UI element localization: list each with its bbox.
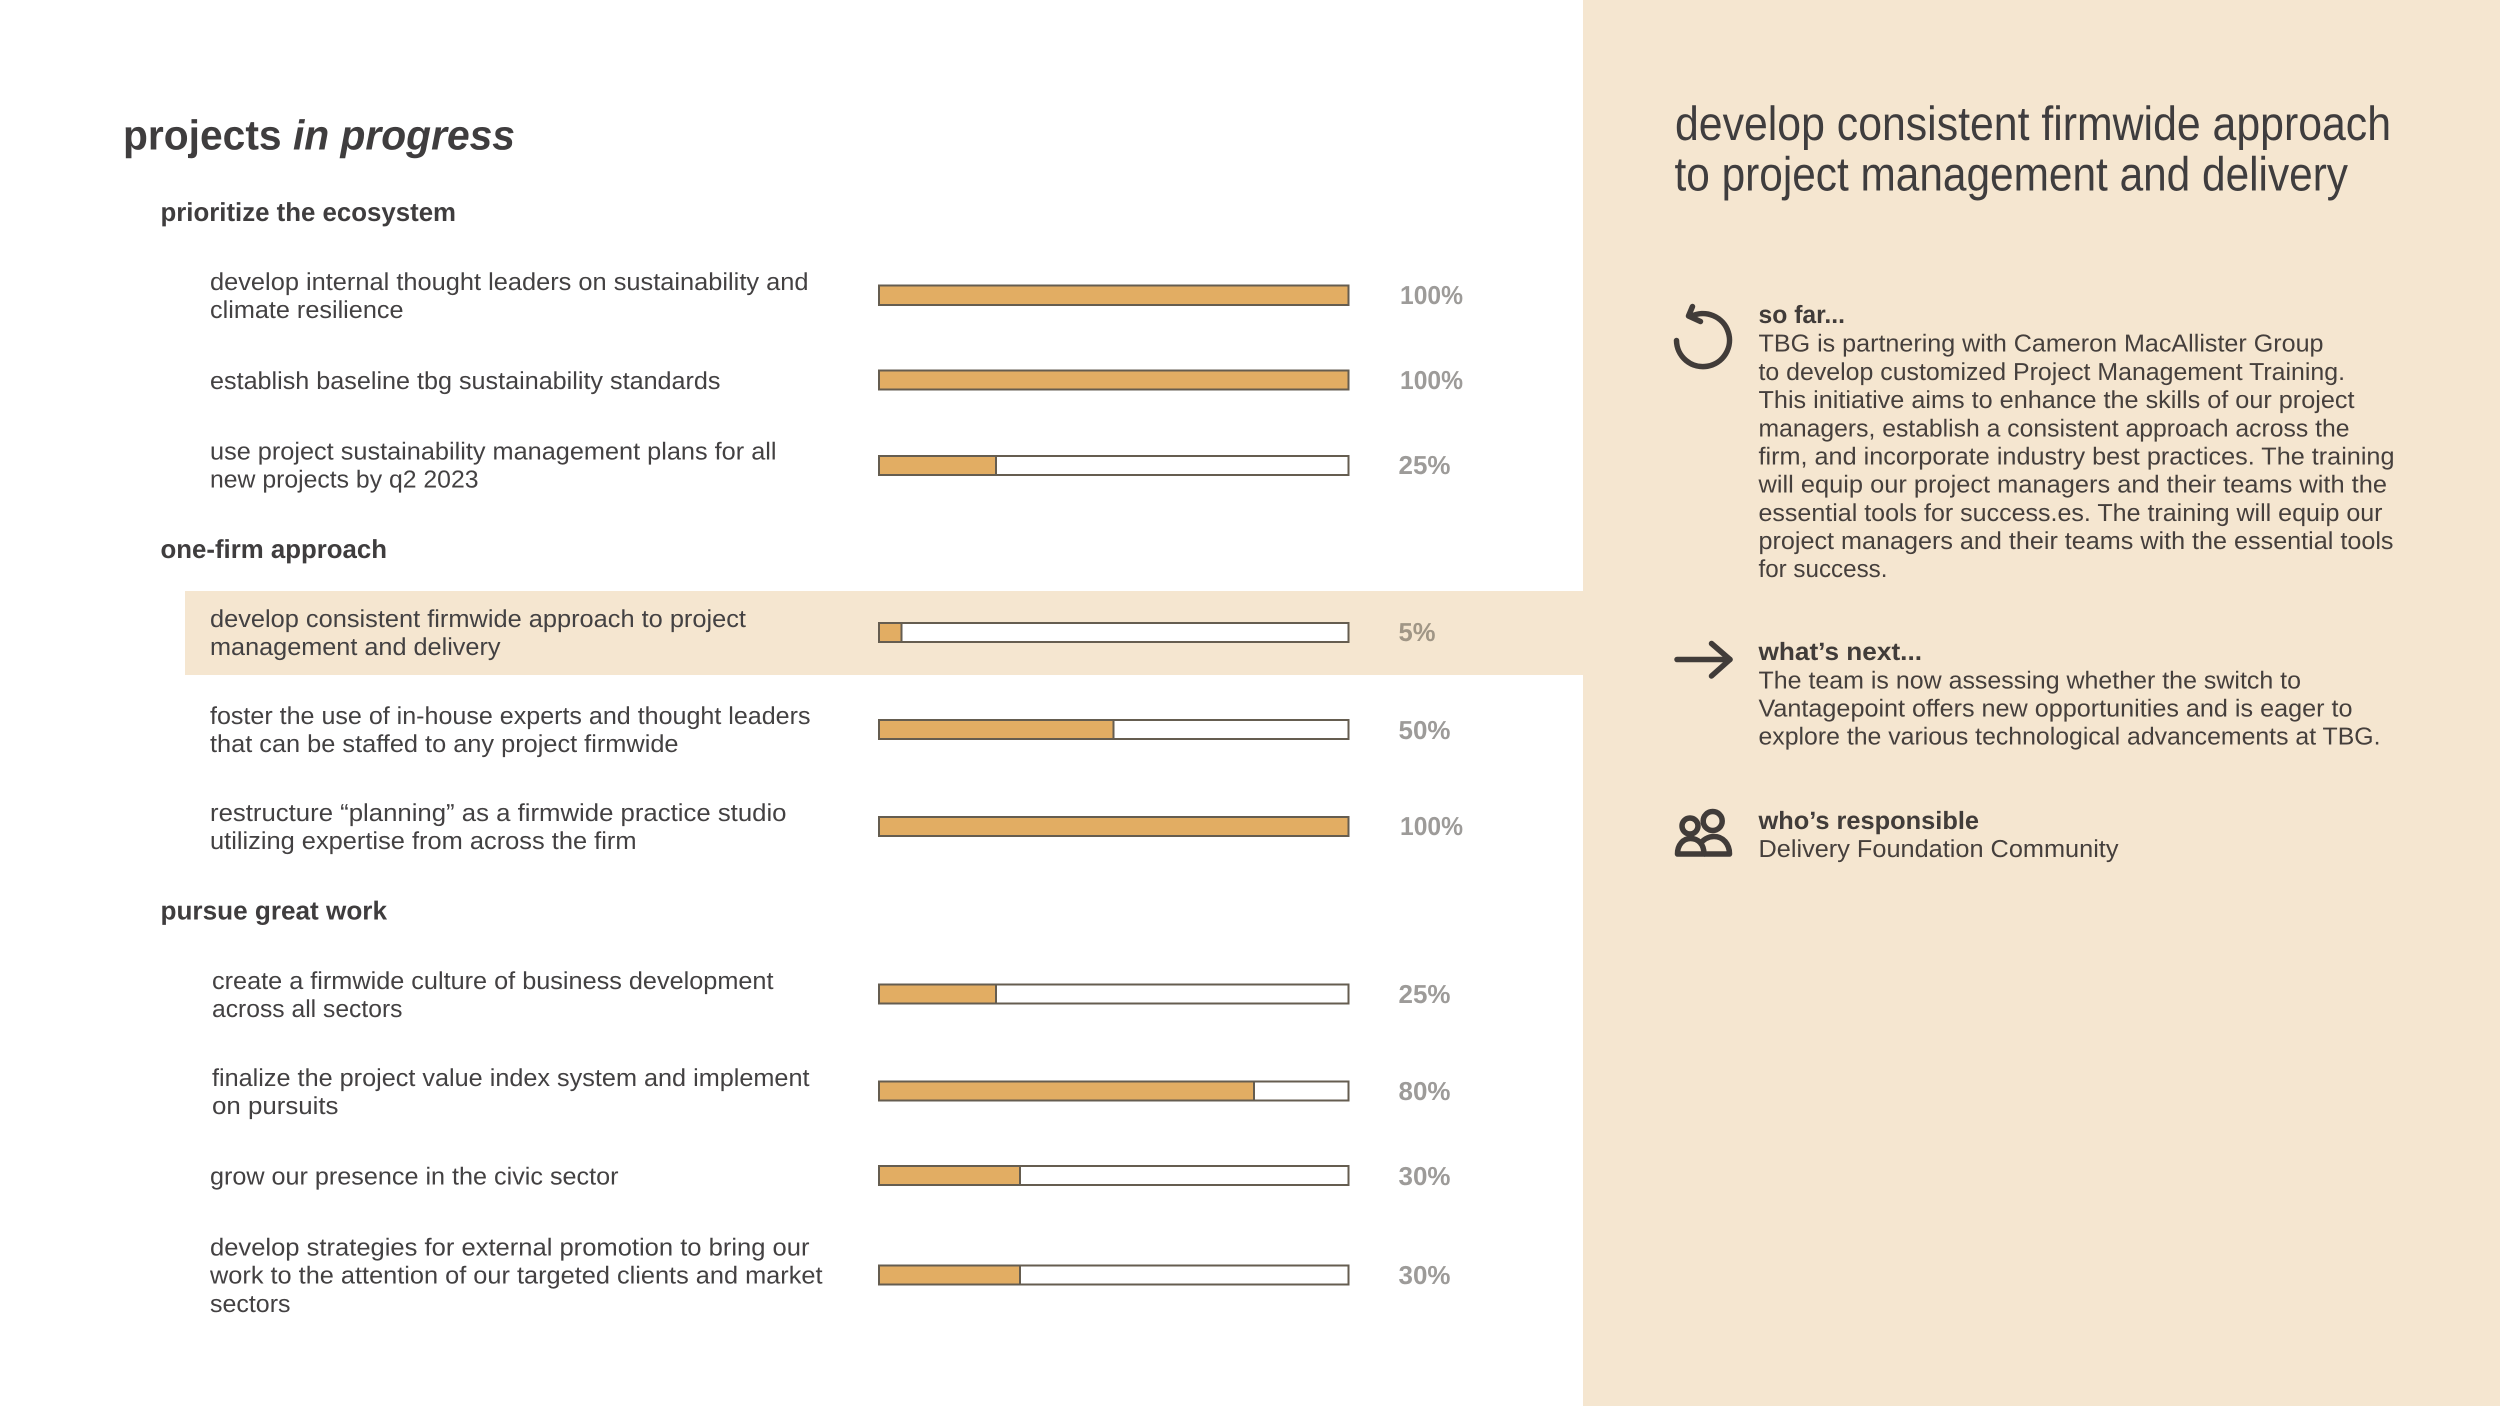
text: so far: This initiative aims to enhance the skills of our project: [1758, 387, 2355, 414]
row: planning practice studio: utilizing expertise from across the firm: [210, 828, 636, 855]
panel: detail sidebar: [1583, 0, 2500, 1406]
row: internal thought leaders: 100%: [1400, 280, 1463, 310]
row: external promotion: develop strategies for external promotion to bring our: [210, 1234, 810, 1262]
text: so far: so far...: [1758, 301, 1845, 329]
panel: pursue great work: [160, 896, 1450, 1318]
panel: row highlight: [185, 591, 1583, 675]
main title: projects in progress: [123, 112, 515, 158]
row: project value index: finalize the project value index system and implement: [212, 1065, 810, 1092]
text: so far: essential tools for success.es. The training will equip our: [1758, 500, 2382, 527]
row: project value index: on pursuits: [212, 1093, 338, 1120]
row: consistent firmwide approach (highlighted): [210, 606, 1436, 661]
text: so far: to develop customized Project Management Training.: [1758, 359, 2345, 386]
icon: counterclockwise loop: [1676, 306, 1729, 367]
heading: pursue great work: [160, 896, 388, 926]
row: in-house experts: 50%: [1398, 715, 1450, 745]
text: so far: TBG is partnering with Cameron MacAllister Group: [1758, 331, 2324, 358]
row: business development culture: across all sectors: [212, 996, 402, 1023]
row: external promotion: work to the attention of our targeted clients and market: [209, 1262, 823, 1290]
row: business development culture: [212, 968, 1450, 1023]
icon: people: [1678, 812, 1730, 854]
row: planning practice studio: [210, 800, 1463, 855]
row: business development culture: create a firmwide culture of business development: [212, 968, 774, 995]
row: project value index: 80%: [1398, 1076, 1450, 1106]
text: so far: project managers and their teams with the essential tools: [1758, 528, 2394, 555]
row: external promotion: [209, 1234, 1451, 1318]
text: what's next: Vantagepoint offers new opportunities and is eager to: [1758, 696, 2352, 722]
text: so far: [1757, 301, 2394, 583]
row: consistent firmwide approach (highlighted): 5%: [1398, 617, 1436, 647]
row: management plans: 25%: [1398, 450, 1450, 480]
row: consistent firmwide approach (highlighted): develop consistent firmwide approach to project: [210, 606, 746, 633]
text: who's responsible: [1757, 807, 2119, 863]
text: who's responsible: who’s responsible: [1757, 807, 1979, 835]
row: planning practice studio: restructure “planning” as a firmwide practice studio: [210, 800, 786, 827]
row: in-house experts: [210, 703, 1450, 758]
row: management plans: [210, 438, 1450, 494]
text: what's next: The team is now assessing whether the switch to: [1758, 667, 2301, 694]
row: external promotion: 30%: [1398, 1260, 1450, 1290]
row: baseline standards: establish baseline tbg sustainability standards: [210, 368, 720, 395]
row: management plans: new projects by q2 2023: [210, 466, 478, 494]
row: in-house experts: foster the use of in-house experts and thought leaders: [210, 703, 810, 730]
row: consistent firmwide approach (highlighted): management and delivery: [210, 634, 501, 661]
text: so far: managers, establish a consistent approach across the: [1758, 415, 2350, 442]
text: who's responsible: Delivery Foundation Community: [1758, 836, 2119, 863]
row: baseline standards: 100%: [1400, 365, 1463, 395]
row: external promotion: sectors: [210, 1291, 290, 1318]
sidebar title: to project management and delivery: [1674, 148, 2348, 202]
row: in-house experts: that can be staffed to any project firmwide: [210, 731, 678, 758]
row: civic sector: grow our presence in the civic sector: [210, 1164, 618, 1190]
panel: one-firm approach: [160, 534, 1463, 855]
row: civic sector: [210, 1161, 1450, 1191]
text: what's next: what’s next...: [1757, 638, 1922, 666]
text: what's next: explore the various technological advancements at TBG.: [1758, 724, 2380, 751]
icon: right arrow: [1677, 644, 1730, 676]
text: so far: for success.: [1758, 556, 1888, 583]
row: civic sector: 30%: [1398, 1161, 1450, 1191]
heading: prioritize the ecosystem: [160, 197, 456, 227]
row: business development culture: 25%: [1398, 979, 1450, 1009]
sidebar title: [1674, 98, 2391, 202]
row: internal thought leaders: [210, 269, 1463, 324]
text: so far: firm, and incorporate industry best practices. The training: [1758, 444, 2394, 470]
row: baseline standards: [210, 365, 1463, 395]
text: so far: will equip our project managers and their teams with the: [1757, 472, 2387, 499]
sidebar title: develop consistent firmwide approach: [1675, 98, 2391, 151]
panel: prioritize the ecosystem: [160, 197, 1463, 494]
heading: one-firm approach: [160, 534, 387, 564]
text: what's next: [1757, 638, 2380, 751]
row: internal thought leaders: develop internal thought leaders on sustainability and: [210, 269, 808, 296]
row: project value index: [212, 1065, 1450, 1120]
row: planning practice studio: 100%: [1400, 811, 1463, 841]
row: internal thought leaders: climate resilience: [210, 297, 404, 324]
row: management plans: use project sustainability management plans for all: [210, 438, 776, 466]
